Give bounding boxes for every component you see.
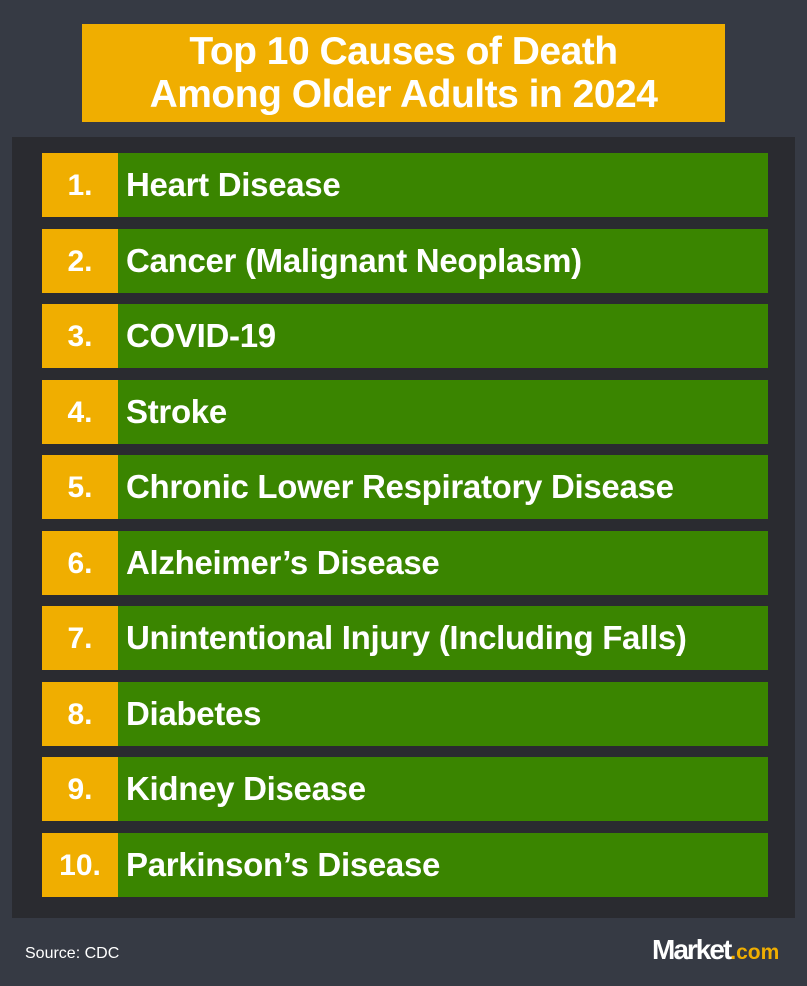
row 8: 8. (67, 698, 93, 731)
row 3: COVID-19 (126, 317, 276, 354)
panel: list (12, 137, 795, 918)
row 5 (42, 455, 768, 519)
row 8 (42, 682, 768, 746)
title: Top 10 Causes of Death (189, 30, 618, 73)
row 7: Unintentional Injury (Including Falls) (126, 619, 687, 656)
row 6 (42, 531, 768, 595)
row 9 (42, 757, 768, 821)
row 7 (42, 606, 768, 670)
row 6: 6. (67, 547, 93, 580)
title (82, 24, 725, 122)
row 8: Diabetes (126, 695, 261, 732)
row 5: Chronic Lower Respiratory Disease (126, 468, 674, 505)
row 2 (42, 229, 768, 293)
row 2: 2. (67, 245, 93, 278)
row 4: Stroke (126, 393, 227, 430)
row 1 (42, 153, 768, 217)
row 1: Heart Disease (126, 166, 340, 203)
row 9: Kidney Disease (126, 770, 366, 807)
title: Among Older Adults in 2024 (150, 73, 657, 116)
row 3: 3. (67, 320, 93, 353)
row 2: Cancer (Malignant Neoplasm) (126, 242, 582, 279)
row 7: 7. (67, 622, 93, 655)
row 10: 10. (59, 849, 101, 882)
row 4 (42, 380, 768, 444)
row 5: 5. (67, 471, 93, 504)
row 10: Parkinson’s Disease (126, 846, 440, 883)
row 4: 4. (67, 396, 93, 429)
source: Source: CDC (25, 945, 119, 962)
row 10 (42, 833, 768, 897)
row 3 (42, 304, 768, 368)
row 1: 1. (67, 169, 93, 202)
row 6: Alzheimer’s Disease (126, 544, 439, 581)
row 9: 9. (67, 773, 93, 806)
logo: Market.com (652, 934, 779, 965)
